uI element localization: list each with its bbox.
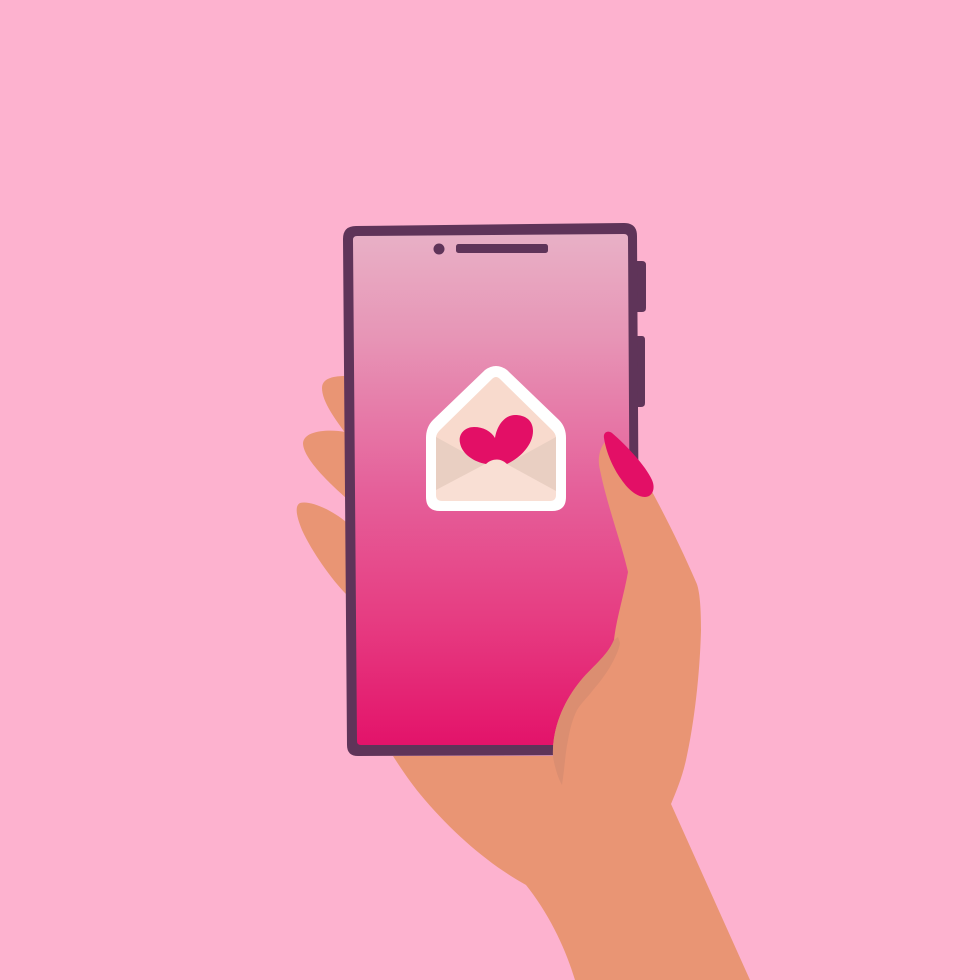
fingers behind phone (297, 376, 346, 594)
camera (434, 244, 444, 254)
envelope sides (436, 437, 556, 495)
hand (393, 432, 750, 980)
envelope icon (426, 366, 566, 511)
phone (343, 223, 646, 756)
heart (460, 415, 533, 464)
speaker (456, 244, 548, 253)
thumb crease shadow (553, 637, 620, 785)
phone body (343, 223, 640, 756)
palm and thumb (393, 442, 750, 980)
envelope border (426, 366, 566, 511)
side buttons (630, 261, 646, 312)
nail (604, 432, 654, 497)
envelope front (436, 460, 556, 501)
envelope flap (436, 377, 556, 495)
screen (353, 234, 631, 745)
